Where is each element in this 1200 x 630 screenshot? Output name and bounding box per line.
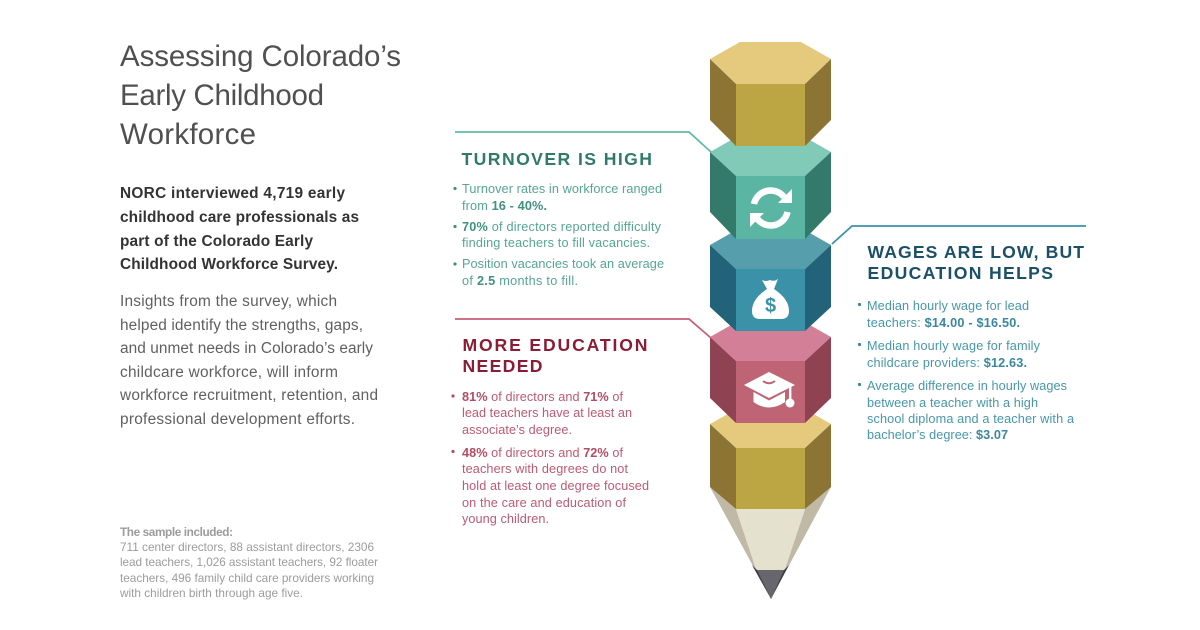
text block: survey summary: Childhood Workforce Survey. [120,256,338,273]
wages bullets: Median hourly wage for family [867,339,1041,353]
text block: survey insights: professional development efforts. [120,411,355,428]
turnover bullets: 70% of directors reported difficulty [462,220,662,234]
heading: wages are low but education helps [868,242,1084,283]
wages bullets [858,299,1075,442]
heading: more education needed: NEEDED [462,356,542,376]
text block: survey summary: NORC interviewed 4,719 early [120,185,345,202]
text block: sample note: The sample included: [120,525,233,539]
turnover bullets: Position vacancies took an average [462,257,664,271]
text block: sample note: with children birth through age five. [119,586,303,600]
text block: sample note: lead teachers, 1,026 assistant teachers, 92 floater [120,555,378,569]
title [120,40,401,151]
pencil green segment [710,135,831,239]
text block: survey summary [120,185,359,273]
panel: turnover [453,149,664,288]
pencil blue segment [710,228,831,331]
pencil pink segment [710,320,831,423]
text block: survey insights: helped identify the strengths, gaps, [120,317,363,334]
education bullets: teachers with degrees do not [462,462,628,476]
education bullets: hold at least one degree focused [462,479,649,493]
turnover bullets: from 16 - 40%. [462,199,547,213]
text block: sample note: teachers, 496 family child care providers working [120,571,374,585]
icon: refresh arrows [750,189,792,227]
education bullets [451,390,649,526]
panel: wages [858,242,1084,442]
wages bullets: teachers: $14.00 - $16.50. [867,316,1020,330]
wages bullets: school diploma and a teacher with a [867,412,1075,426]
heading: turnover is high: TURNOVER IS HIGH [462,149,652,169]
wages bullets: Average difference in hourly wages [867,379,1067,393]
wages bullets: childcare providers: $12.63. [867,356,1027,370]
title: Workforce [120,118,256,151]
pencil lower yellow segment [710,407,831,509]
turnover bullets: of 2.5 months to fill. [462,274,578,288]
pencil illustration [710,42,831,599]
connector line: education [455,319,711,338]
text block: sample note [119,525,378,600]
education bullets: on the care and education of [462,496,626,510]
text block: survey insights: and unmet needs in Colorado’s early [120,340,373,357]
education bullets: 81% of directors and 71% of [462,390,623,404]
connector line: turnover [455,132,711,152]
text block: sample note: 711 center directors, 88 assistant directors, 2306 [120,540,374,554]
heading: wages are low but education helps: WAGES ARE LOW, BUT [868,242,1084,262]
wages bullets: bachelor’s degree: $3.07 [867,428,1008,442]
text block: survey summary: childhood care professionals as [120,209,359,226]
text block: survey insights: workforce recruitment, retention, and [119,387,378,404]
education bullets: lead teachers have at least an [462,406,632,420]
text block: survey summary: part of the Colorado Early [120,233,313,250]
pencil tip [710,487,831,599]
icon: graduation cap [744,372,795,408]
title: Early Childhood [120,79,324,112]
text block: survey insights [119,293,378,428]
text block: survey insights: childcare workforce, will inform [120,364,338,381]
heading: more education needed: MORE EDUCATION [462,335,648,355]
heading: wages are low but education helps: EDUCATION HELPS [868,263,1053,283]
education bullets: 48% of directors and 72% of [462,446,623,460]
icon: money bag: $ [765,295,776,317]
turnover bullets [453,182,664,288]
wages bullets: Median hourly wage for lead [867,299,1029,313]
education bullets: associate’s degree. [462,423,572,437]
education bullets: young children. [462,512,549,526]
turnover bullets: Turnover rates in workforce ranged [462,182,662,196]
text block: survey insights: Insights from the survey, which [120,293,337,310]
turnover bullets: finding teachers to fill vacancies. [462,236,650,250]
heading: more education needed [462,335,648,376]
panel: education [451,335,649,526]
title: Assessing Colorado’s [120,40,401,73]
connector line: wages [832,226,1086,244]
pencil top yellow segment [710,42,831,146]
wages bullets: between a teacher with a high [867,396,1038,410]
